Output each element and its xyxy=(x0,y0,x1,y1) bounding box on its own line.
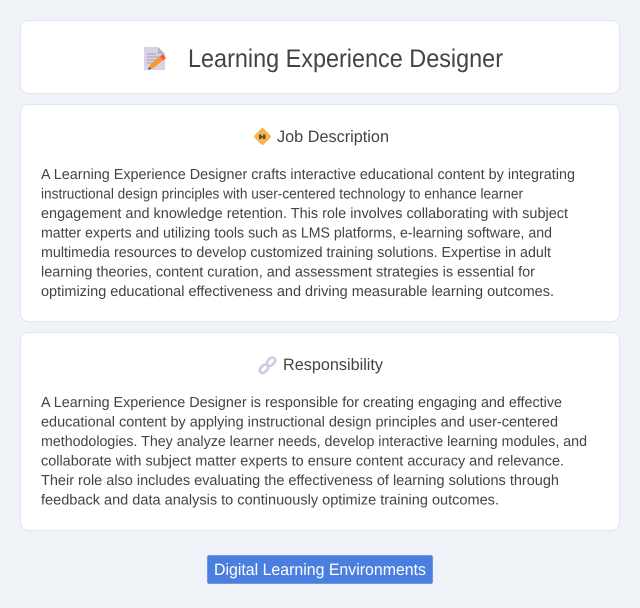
text block: job description xyxy=(41,167,575,300)
text block: responsibility xyxy=(41,395,587,508)
text block: responsibility: methodologies. They analyze learner needs, develop interactive learning modules, and xyxy=(41,434,587,450)
heading: responsibility: Responsibility xyxy=(283,356,384,374)
text block: job description: A Learning Experience Designer crafts interactive educational content by integrating xyxy=(41,167,575,183)
text block: job description: learning theories, content curation, and assessment strategies is essential for xyxy=(41,264,535,280)
tag button: Digital Learning Environments xyxy=(214,561,426,579)
text block: responsibility: feedback and data analysis to continuously optimize training outcomes. xyxy=(41,492,499,508)
text block: responsibility: Their role also includes evaluating the effectiveness of learning solutions through xyxy=(41,473,559,489)
title: Learning Experience Designer xyxy=(188,45,503,73)
text block: responsibility: A Learning Experience Designer is responsible for creating engaging and effective xyxy=(41,395,562,411)
text block: job description: matter experts and utilizing tools such as LMS platforms, e-learning software, and xyxy=(41,226,552,242)
text block: job description: engagement and knowledge retention. This role involves collaborating with subject xyxy=(41,206,568,222)
text block: job description: multimedia resources to develop customized training solutions. Expertise in adult xyxy=(41,245,551,261)
icon: chain link xyxy=(259,356,276,374)
heading: job description: Job Description xyxy=(277,128,389,146)
text block: responsibility: collaborate with subject matter experts to ensure content accuracy and relevance. xyxy=(41,454,564,470)
text block: responsibility: educational content by applying instructional design principles and user-centered xyxy=(41,414,558,430)
text block: job description: instructional design principles with user-centered technology to enhance learner xyxy=(41,186,523,202)
text block: job description: optimizing educational effectiveness and driving measurable learning outcomes. xyxy=(41,284,554,300)
panel: title card xyxy=(20,20,620,94)
panel: job description xyxy=(20,104,620,322)
tag button xyxy=(207,555,433,584)
panel: responsibility xyxy=(20,332,620,530)
icon: document with pencil xyxy=(144,47,166,70)
icon: job description diamond xyxy=(253,127,272,146)
